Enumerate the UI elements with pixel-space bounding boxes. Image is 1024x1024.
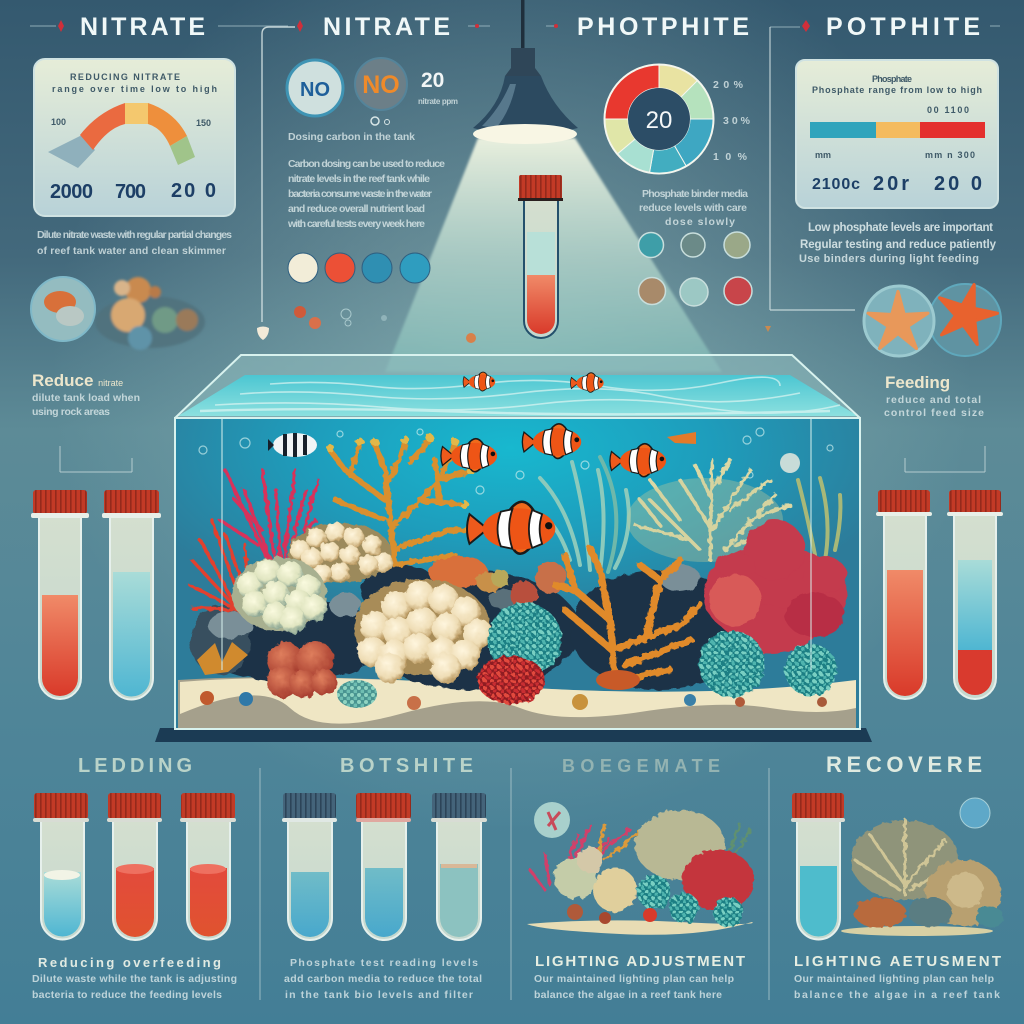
donut side labels [713,79,751,163]
donut chart: 20 [646,107,672,134]
donut side labels: 20% [713,79,744,91]
heading: botshite: BOTSHITE [340,755,473,777]
recovere tan coral [925,860,1001,926]
bracket [60,446,132,472]
recovere teal coral [976,907,1004,927]
text block: leeding: Reducing overfeeding [38,955,221,970]
bottom tubes: leeding [33,793,236,940]
text: feeding: control feed size [884,407,984,419]
clownfish [522,424,581,458]
red fan coral lower left [190,520,248,610]
text block: lighting left [534,953,745,1001]
dark rocks [190,565,750,690]
text block: botshite: add carbon media to reduce the total [284,973,482,985]
sand bright [180,678,856,724]
orange coral small left [197,642,248,675]
text: reduce: dilute tank load when [32,392,140,404]
surface highlights [200,377,840,414]
heading: boegemate: BOEGEMATE [562,756,720,776]
coral: recovere [841,798,1004,936]
test tube: left blue [102,490,161,699]
text block: nitrate centre [287,131,445,230]
text block: nitrate centre: bacteria consume waste in the water [288,188,432,200]
teal coral [488,603,562,677]
striped fish [268,433,317,457]
connector end shield [257,326,269,340]
text: feeding: reduce and total [886,394,981,406]
text block: potphite: Regular testing and reduce patiently [800,239,997,251]
text: reduce: Reduce nitrate [32,371,123,390]
heading: phosphite: PHOTPHITE [577,13,749,41]
badges: NO: NO [362,71,400,99]
panel: gauge: 20 0 [171,180,216,202]
mini reef red coral [682,850,754,910]
recovere pale fan [851,820,959,900]
text block: nitrate centre: nitrate levels in the reef tank while [288,173,430,185]
lamp [473,0,578,144]
recovere orange coral [854,898,906,928]
test tube: right red [876,490,932,699]
pale coral left [232,557,327,633]
small green kelp right [798,478,840,560]
red coral right [703,520,847,654]
text block: phosphite: reduce levels with care [639,202,747,214]
text: reduce: using rock areas [32,406,110,418]
heading: recovere: RECOVERE [826,752,982,777]
text block: phosphite: Phosphate binder media [642,188,748,200]
panel: colour bar: Phosphate [872,74,912,84]
text block: lighting right: LIGHTING AETUSMENT [794,953,1001,970]
badges: NO: NO [300,79,330,101]
shell [780,453,800,473]
text block: phosphite [639,188,748,228]
connector mark [765,326,771,332]
panel: gauge: REDUCING NITRATE [70,72,180,82]
test tube: right blue red [947,490,1003,699]
tank stand [155,728,872,742]
pale branch coral right [635,460,790,560]
donut side labels: 10% [713,151,748,163]
orange branch coral top [330,440,470,565]
badges: NO: 20 [421,69,444,92]
tank back glass [174,355,860,418]
donut side labels: 30% [723,115,751,127]
red fan coral left [220,470,318,565]
clownfish main [467,502,555,554]
test tube: centre [518,175,563,338]
panel: gauge: 150 [196,118,211,128]
orange branch coral centre right [555,548,700,680]
recovere icon [960,798,990,828]
surface clownfish [463,372,495,391]
heading: leeding: LEDDING [78,755,192,777]
panel: gauge: range over time low to high [52,84,217,94]
pink corals mid [491,562,567,609]
recovere sand [841,926,993,936]
rocks on sand [200,691,827,710]
donut chart [604,64,714,174]
panel: colour bar: mm [815,150,831,160]
text block: gauge caption: of reef tank water and clean skimmer [37,245,226,257]
orange coral mid [428,556,504,592]
bottom tube: recovere [791,793,845,940]
panel: colour bar: 20 0 [934,173,982,195]
heading: potphite: POTPHITE [826,13,980,41]
bubbles [199,428,833,494]
text block: gauge caption [37,229,232,257]
teal coral right [699,631,765,697]
panel: colour bar: Phosphate range from low to high [812,85,982,95]
panel: colour bar: 2100c [812,176,860,193]
text block: leeding: Dilute waste while the tank is adjusting [32,973,237,985]
icon: starfish [864,277,1003,356]
heading: nitrate centre: NITRATE [323,13,450,41]
small teal rock [337,680,377,708]
text block: lighting left: LIGHTING ADJUSTMENT [535,953,745,970]
surface clownfish [570,373,604,392]
panel: gauge: 100 [51,117,66,127]
mini reef icon detail [548,812,560,830]
mini reef sand [527,920,753,935]
text block: nitrate centre: Dosing carbon in the tank [288,131,415,143]
pink brain coral [267,641,337,698]
orange coral base [596,670,640,690]
tank water [175,418,860,729]
text block: botshite: Phosphate test reading levels [290,957,478,969]
panel: colour bar [796,60,998,208]
text block: gauge caption: Dilute nitrate waste with regular partial changes [37,229,232,241]
colour swatches [288,253,430,283]
panel: gauge [34,59,235,216]
panel: gauge: 700 [115,181,146,203]
text block: nitrate centre: and reduce overall nutrient load [288,203,425,215]
grey rocks [208,564,700,639]
bottom tubes: botshite [282,793,487,940]
mini reef rocks [567,904,657,924]
seaweed [540,457,629,572]
icon: rock circle [31,277,95,341]
light beam [385,138,722,372]
test tube: left red [31,490,89,699]
badges: NO [287,58,458,125]
teal coral far right [785,644,837,696]
panel: colour bar: 00 1100 [927,105,969,115]
panel: colour bar: 20r [873,173,909,195]
orange coral tips [326,434,474,534]
dividers [260,768,769,1000]
mini reef teal [637,875,743,927]
large cream coral centre [354,579,493,683]
icon: rock pile [95,277,205,350]
clownfish [610,444,666,477]
text block: botshite [284,957,482,1001]
text: feeding: Feeding [885,373,950,392]
small icons centre [294,306,476,343]
text block: phosphite: dose slowly [665,216,735,228]
text block: potphite [799,222,997,265]
mini reef fans [530,825,750,890]
text block: lighting right: Our maintained lighting plan can help [794,973,994,985]
clownfish [441,439,497,472]
tank glass outline [175,355,860,729]
panel: gauge: 2000 [50,181,93,203]
mini reef pale coral [635,810,725,880]
red diamonds [58,20,810,32]
cream coral small [288,522,393,584]
connector right [770,27,855,310]
text block: nitrate centre: Carbon dosing can be used to reduce [288,158,445,170]
bracket right [905,446,985,472]
water surface [178,375,858,416]
panel: colour bar: mm n 300 [925,150,975,160]
text block: potphite: Use binders during light feeding [799,253,979,265]
text block: lighting right: balance the algae in a reef tank [794,989,1000,1001]
text block: botshite: in the tank bio levels and filter [285,989,473,1001]
text: feeding [884,373,984,419]
small orange fish [667,432,696,444]
text block: lighting left: Our maintained lighting plan can help [534,973,734,985]
mini reef cream [554,847,637,912]
text block: nitrate centre: with careful tests every week here [287,218,425,230]
text block: leeding: bacteria to reduce the feeding levels [32,989,222,1001]
sand [178,677,856,728]
connector line [262,27,295,322]
badges: NO: nitrate ppm [418,97,458,106]
pale coral mound [627,478,783,562]
red coral ball [477,656,545,704]
heading: nitrate left: NITRATE [80,13,205,41]
mini reef [527,802,754,935]
gauge arc [48,103,195,168]
text block: leeding [32,955,237,1001]
icons: phosphite circles [638,232,752,306]
text: reduce [32,371,140,418]
text block: lighting left: balance the algae in a reef tank here [534,989,722,1001]
text block: lighting right [794,953,1001,1001]
recovere blue coral [908,897,952,927]
text block: potphite: Low phosphate levels are important [808,222,993,234]
aquarium [155,355,872,742]
mini reef icon [534,802,570,838]
heading decorations [30,26,1000,27]
